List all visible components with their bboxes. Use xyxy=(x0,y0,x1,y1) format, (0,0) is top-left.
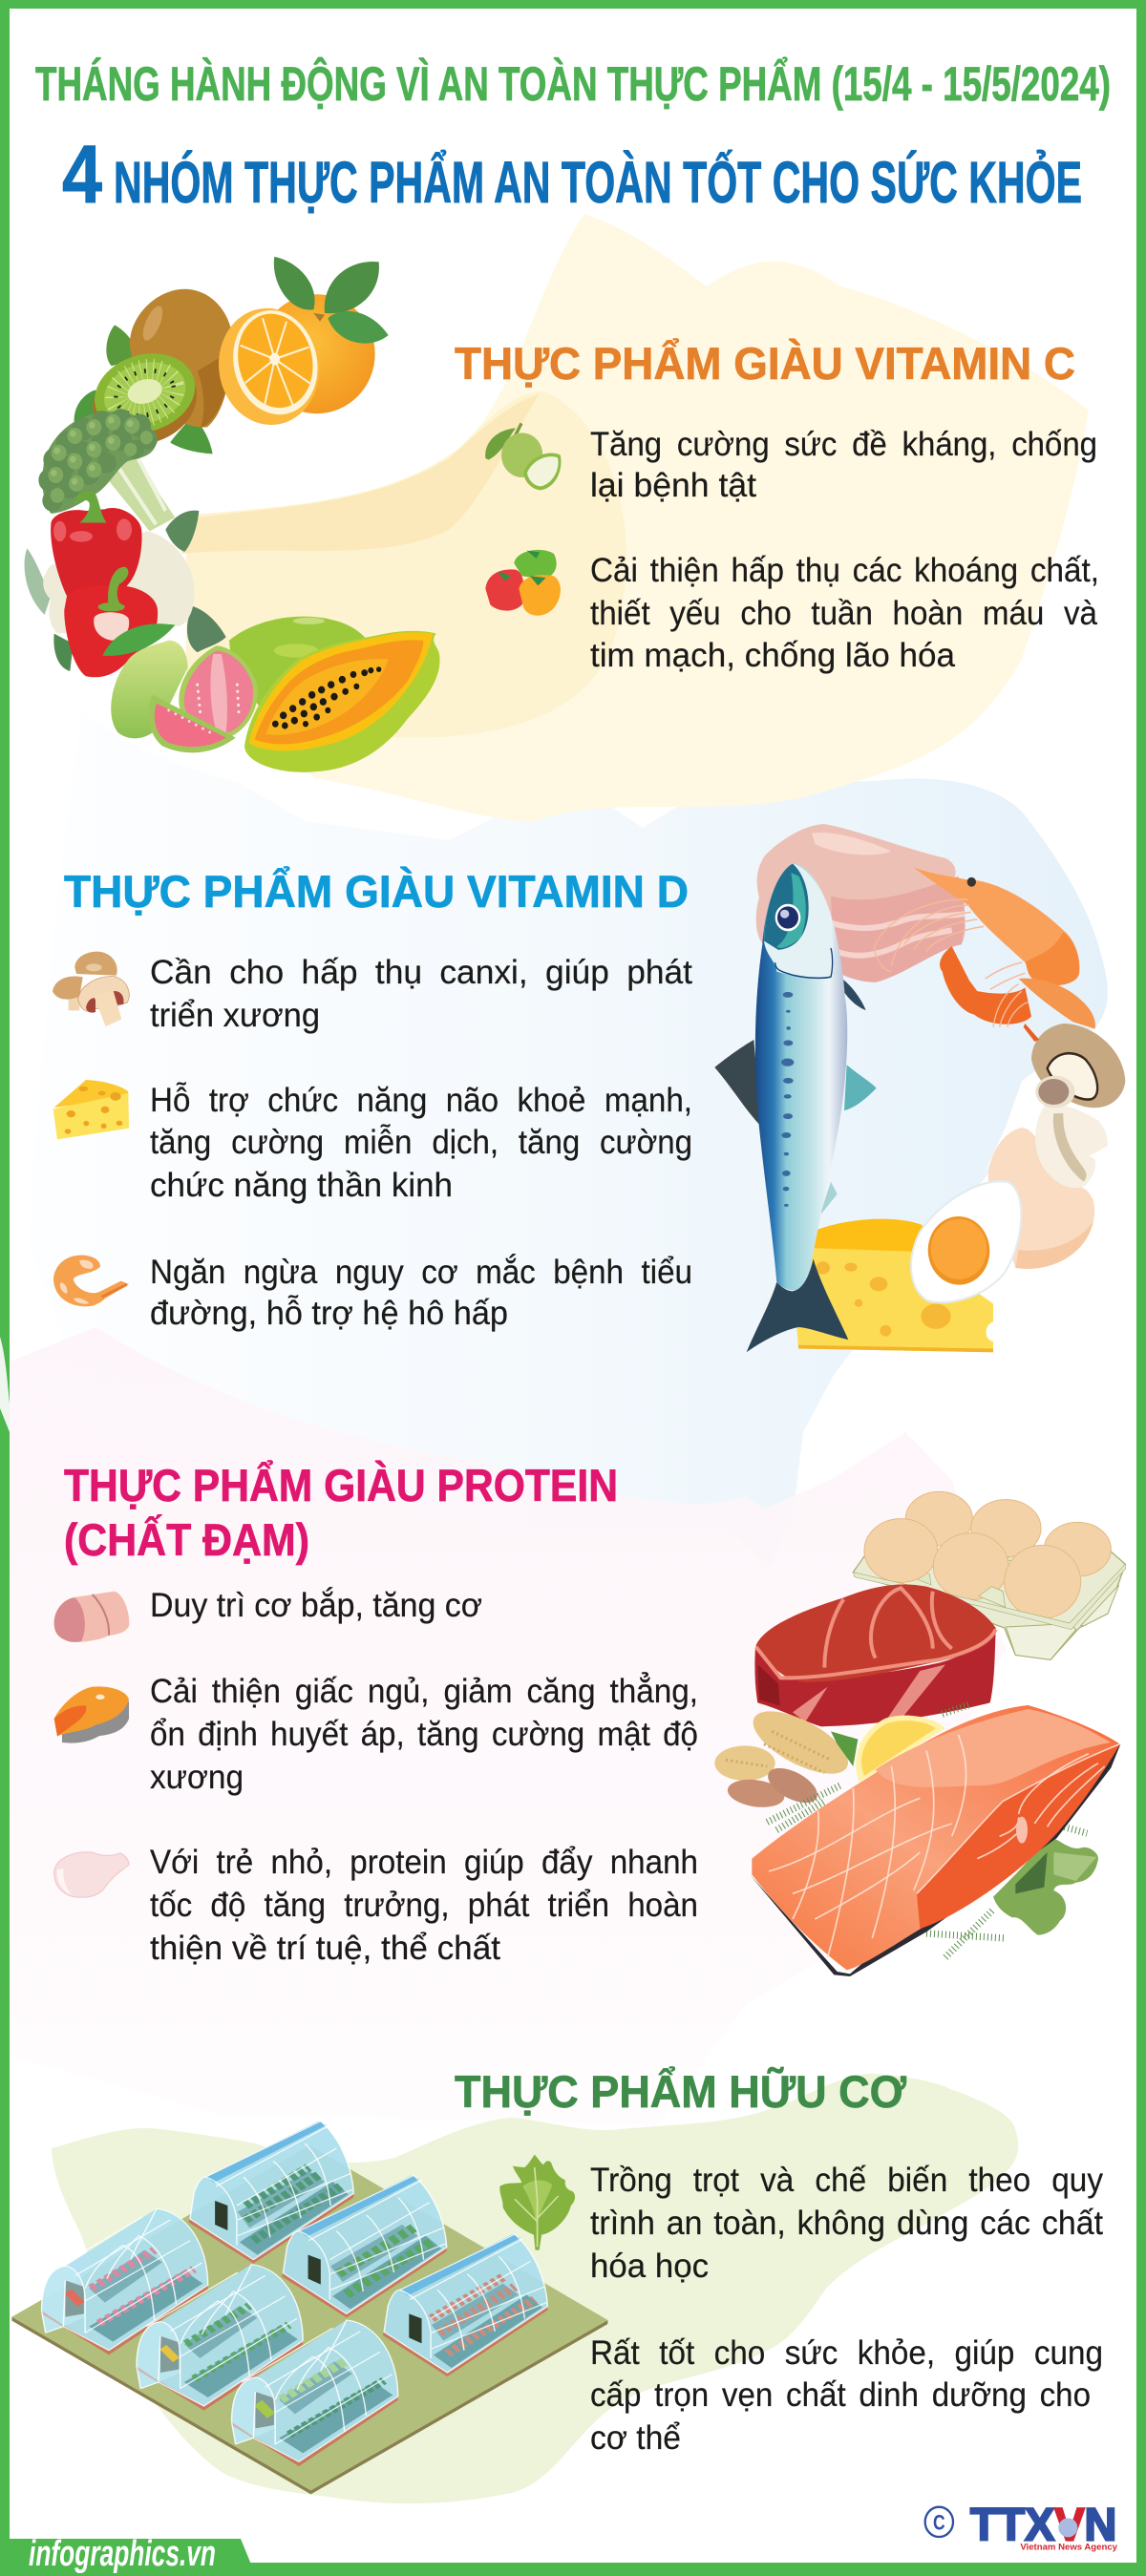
title: main heading xyxy=(62,129,1082,221)
heading: vitamin C: THỰC PHẨM GIÀU VITAMIN C xyxy=(455,338,1075,389)
text: organic benefit 2: Rất tốt cho sức khỏe, giúp cung xyxy=(590,2334,1103,2372)
text: vitamin C benefit 1: Tăng cường sức đề kháng, chống xyxy=(590,426,1097,463)
greenhouse: upper right xyxy=(282,2175,447,2317)
icon: shrimp xyxy=(53,1256,129,1306)
greenhouse: right xyxy=(382,2234,547,2376)
heading: protein: THỰC PHẨM GIÀU PROTEIN xyxy=(64,1460,618,1510)
text: vitamin D benefit 2: tăng cường miễn dịch, tăng cường xyxy=(150,1124,692,1161)
heading: protein xyxy=(64,1460,618,1565)
icon: salmon steak xyxy=(54,1686,129,1743)
greenhouse: top xyxy=(188,2122,353,2264)
logo: TTXVN: Vietnam News Agency xyxy=(1020,2542,1117,2551)
text: vitamin D benefit 2 xyxy=(150,1082,692,1204)
illustration: eggs, beef, peanuts and salmon xyxy=(714,1491,1125,1976)
text: organic benefit 1: trình an toàn, không dùng các chất xyxy=(590,2205,1103,2242)
text: vitamin D benefit 2: chức năng thần kinh xyxy=(150,1167,453,1204)
text: vitamin D benefit 1 xyxy=(150,954,692,1034)
greenhouse: bottom xyxy=(232,2320,398,2466)
text: protein benefit 2 xyxy=(150,1672,698,1796)
icon: mushrooms xyxy=(53,952,129,1026)
footer tab: infographics.vn xyxy=(29,2534,216,2574)
background blob: yellow xyxy=(181,214,1089,821)
text: protein benefit 3: thiện về trí tuệ, thể chất xyxy=(150,1930,500,1967)
text: vitamin D benefit 1: triển xương xyxy=(150,997,320,1034)
text: vitamin D benefit 3 xyxy=(150,1254,692,1332)
text: protein benefit 2: ổn định huyết áp, tăng cường mật độ xyxy=(150,1716,698,1753)
icon: bell peppers xyxy=(485,550,561,616)
heading: protein: (CHẤT ĐẠM) xyxy=(64,1514,309,1565)
icon: lettuce xyxy=(499,2155,575,2250)
text: vitamin C benefit 2 xyxy=(590,552,1099,674)
text: vitamin C benefit 1: lại bệnh tật xyxy=(590,467,756,504)
title: main heading: 4 xyxy=(62,129,102,221)
text: protein benefit 2: xương xyxy=(150,1759,244,1796)
text: vitamin D benefit 1: Cần cho hấp thụ canxi, giúp phát xyxy=(150,954,692,991)
logo: TTXVN: C xyxy=(933,2510,945,2534)
background blob: pink xyxy=(0,1327,1006,2124)
illustration: greenhouses xyxy=(11,2122,607,2494)
text: protein benefit 2: Cải thiện giấc ngủ, giảm căng thẳng, xyxy=(150,1672,698,1710)
background blob: blue xyxy=(29,711,1108,1566)
heading: vitamin D: THỰC PHẨM GIÀU VITAMIN D xyxy=(64,866,689,917)
text: protein benefit 1: Duy trì cơ bắp, tăng cơ xyxy=(150,1587,482,1624)
icon: cheese xyxy=(53,1080,129,1139)
text: organic benefit 1: hóa học xyxy=(590,2248,709,2285)
text: protein benefit 3: Với trẻ nhỏ, protein giúp đẩy nhanh xyxy=(150,1844,698,1881)
text: organic benefit 2: cấp trọn vẹn chất dinh dưỡng cho xyxy=(590,2376,1091,2414)
text: vitamin D benefit 3: Ngăn ngừa nguy cơ mắc bệnh tiểu xyxy=(150,1254,692,1291)
text: organic benefit 2: cơ thể xyxy=(590,2419,681,2457)
text: vitamin D benefit 2: Hỗ trợ chức năng não khoẻ mạnh, xyxy=(150,1082,692,1119)
text: vitamin C benefit 1 xyxy=(590,426,1097,504)
text: vitamin D benefit 3: đường, hỗ trợ hệ hô hấp xyxy=(150,1295,508,1332)
icon: meat xyxy=(54,1592,129,1642)
text: organic benefit 1: Trồng trọt và chế biến theo quy xyxy=(590,2162,1103,2199)
logo: TTXVN: TTXVN xyxy=(970,2500,1116,2551)
text: organic benefit 2 xyxy=(590,2334,1103,2457)
greenhouse: middle xyxy=(137,2265,303,2411)
illustration: vitamin D foods forming letter D xyxy=(714,824,1125,1352)
greenhouse: left xyxy=(42,2208,208,2354)
heading: organic: THỰC PHẨM HỮU CƠ xyxy=(455,2066,907,2117)
icon: chicken drumstick xyxy=(54,1852,129,1897)
text: organic benefit 1 xyxy=(590,2162,1103,2285)
text: vitamin C benefit 2: thiết yếu cho tuần hoàn máu và xyxy=(590,595,1097,632)
text: vitamin C benefit 2: Cải thiện hấp thụ các khoáng chất, xyxy=(590,552,1099,589)
icon: guava xyxy=(485,423,561,490)
text: protein benefit 3 xyxy=(150,1844,698,1967)
text: protein benefit 3: tốc độ tăng trưởng, phát triển hoàn xyxy=(150,1887,698,1924)
illustration: vitamin C foods forming letter C xyxy=(25,257,440,772)
background blob: green xyxy=(52,2074,1018,2503)
text: vitamin C benefit 2: tim mạch, chống lão hóa xyxy=(590,637,956,674)
